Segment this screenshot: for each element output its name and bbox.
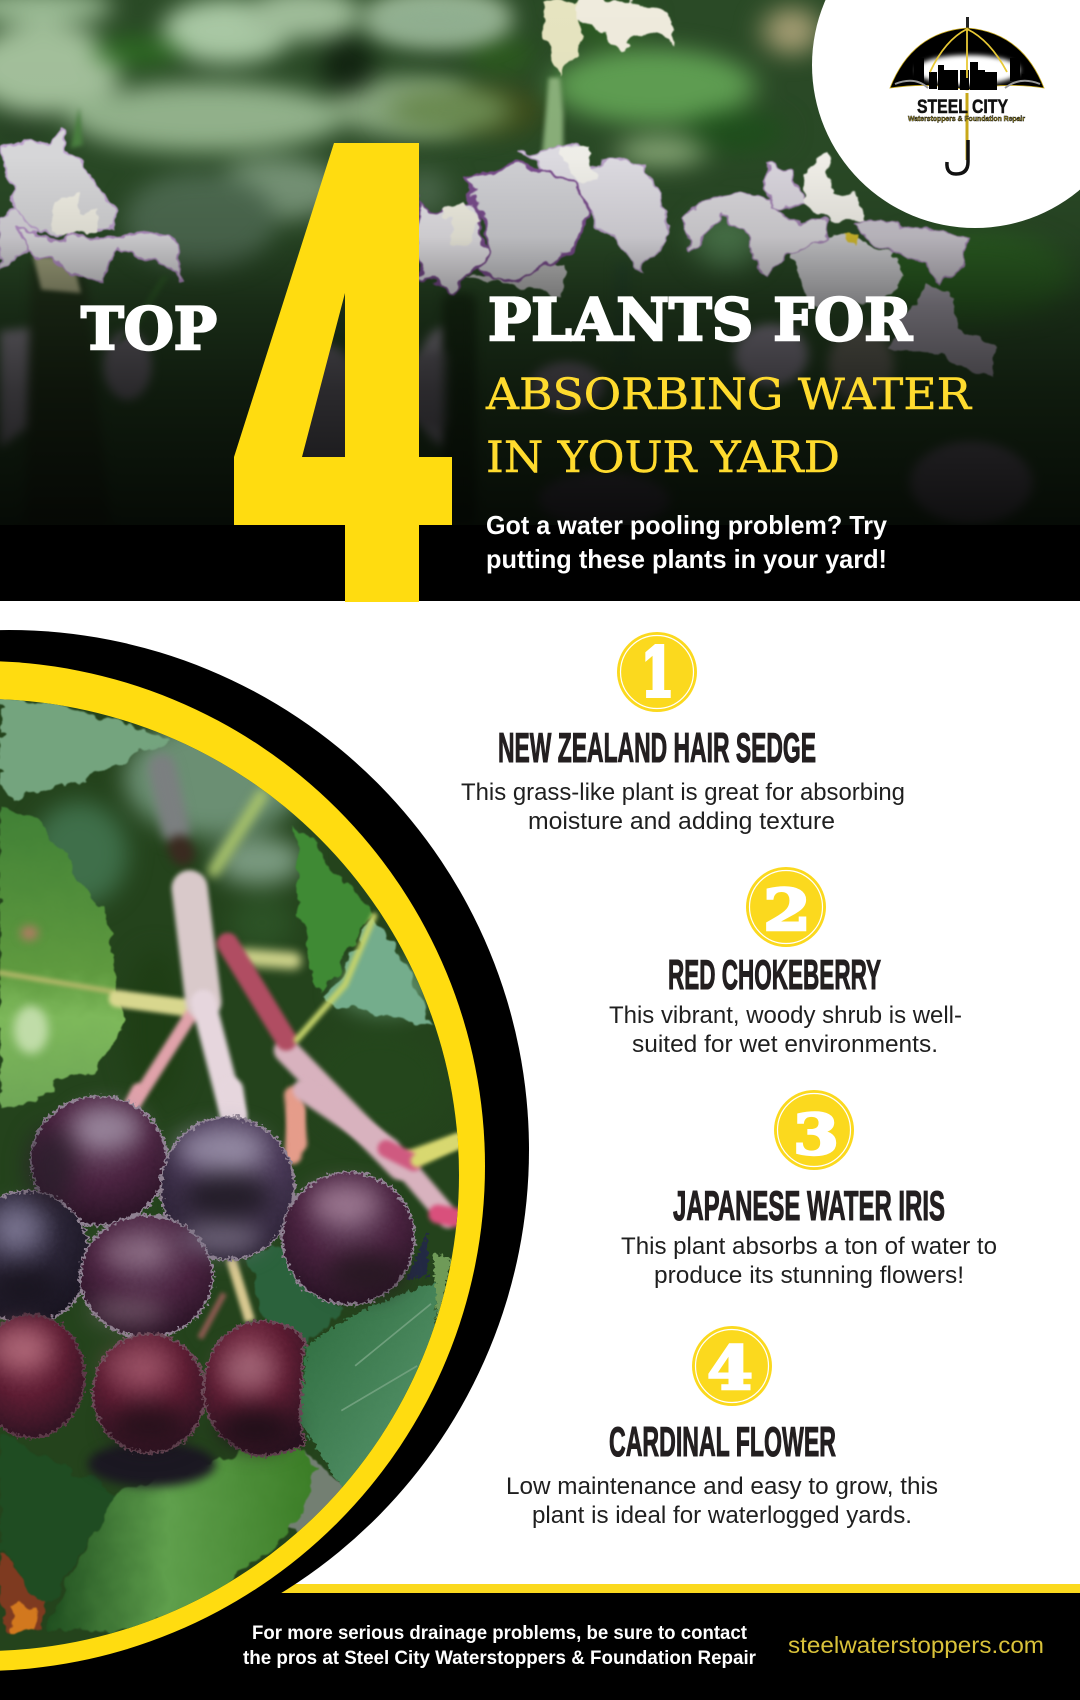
header photo: white irises on green foliage xyxy=(0,0,1080,528)
circular photo frame: yellow ring xyxy=(0,661,485,1671)
foliage and flowers, right part xyxy=(367,0,1073,528)
intro text: Got a water pooling problem? Try xyxy=(486,510,888,540)
item 4 xyxy=(506,1326,938,1529)
top iris stalk xyxy=(541,78,563,169)
body text 4 xyxy=(506,1473,938,1529)
body text 4: Low maintenance and easy to grow, this xyxy=(506,1473,938,1500)
footer message xyxy=(243,1622,756,1669)
icon: umbrella logo xyxy=(890,17,1044,174)
foliage and flowers, left part xyxy=(0,0,545,524)
body text 2 xyxy=(609,1002,962,1058)
intro text: putting these plants in your yard! xyxy=(486,544,887,574)
body text 1 xyxy=(461,779,905,835)
heading 4: CARDINAL FLOWER xyxy=(609,1418,836,1465)
upper photo: leaves and branches xyxy=(0,699,459,1168)
body text 4: plant is ideal for waterlogged yards. xyxy=(532,1502,912,1529)
chokeberry cluster xyxy=(0,1096,414,1456)
heading 2: RED CHOKEBERRY xyxy=(668,951,881,998)
number badge 3 xyxy=(774,1090,854,1170)
icon: umbrella logo: Waterstoppers & Foundation Repair xyxy=(908,114,1025,123)
body text 1: This grass-like plant is great for absorbing xyxy=(461,779,905,806)
logo circle xyxy=(812,0,1080,228)
title: PLANTS FOR: PLANTS FOR xyxy=(488,286,913,354)
black band under header xyxy=(0,525,1080,601)
footer message: the pros at Steel City Waterstoppers & Foundation Repair xyxy=(243,1647,756,1669)
icon: umbrella logo: STEEL CITY xyxy=(917,97,1008,118)
body text 3: This plant absorbs a ton of water to xyxy=(621,1233,997,1260)
number badge 3: 3 xyxy=(793,1102,839,1168)
photo: chokeberries on branch xyxy=(0,690,480,1660)
number badge 4: 4 xyxy=(707,1334,753,1404)
circular photo frame: black ring xyxy=(0,630,529,1670)
lower photo: berries and leaves xyxy=(0,1090,459,1631)
footer message: For more serious drainage problems, be sure to contact xyxy=(252,1622,747,1644)
heading 1: NEW ZEALAND HAIR SEDGE xyxy=(498,724,816,771)
body text 3: produce its stunning flowers! xyxy=(654,1262,964,1289)
big yellow numeral 4 xyxy=(234,143,452,602)
berry highlights and dimples xyxy=(0,1107,403,1449)
irises, ruffled xyxy=(418,0,1000,376)
body text 1: moisture and adding texture xyxy=(528,808,835,835)
number badge 1: 1 xyxy=(641,633,674,712)
item 3 xyxy=(621,1090,997,1289)
body text 2: This vibrant, woody shrub is well- xyxy=(609,1002,962,1029)
item 2 xyxy=(609,867,962,1058)
body text 3 xyxy=(621,1233,997,1289)
footer yellow rule xyxy=(278,1584,1080,1593)
title: TOP: TOP xyxy=(81,295,217,363)
number badge 4 xyxy=(692,1326,772,1406)
footer website: steelwaterstoppers.com xyxy=(788,1632,1044,1658)
body text 2: suited for wet environments. xyxy=(632,1031,938,1058)
item 1 xyxy=(461,632,905,835)
number badge 1 xyxy=(617,632,697,712)
intro text xyxy=(486,510,888,574)
number badge 2 xyxy=(746,867,826,947)
number badge 2: 2 xyxy=(763,877,811,944)
subtitle: ABSORBING WATER: ABSORBING WATER xyxy=(485,370,973,420)
left iris xyxy=(0,128,181,279)
subtitle: IN YOUR YARD: IN YOUR YARD xyxy=(486,433,840,483)
footer black bar xyxy=(0,1593,1080,1700)
